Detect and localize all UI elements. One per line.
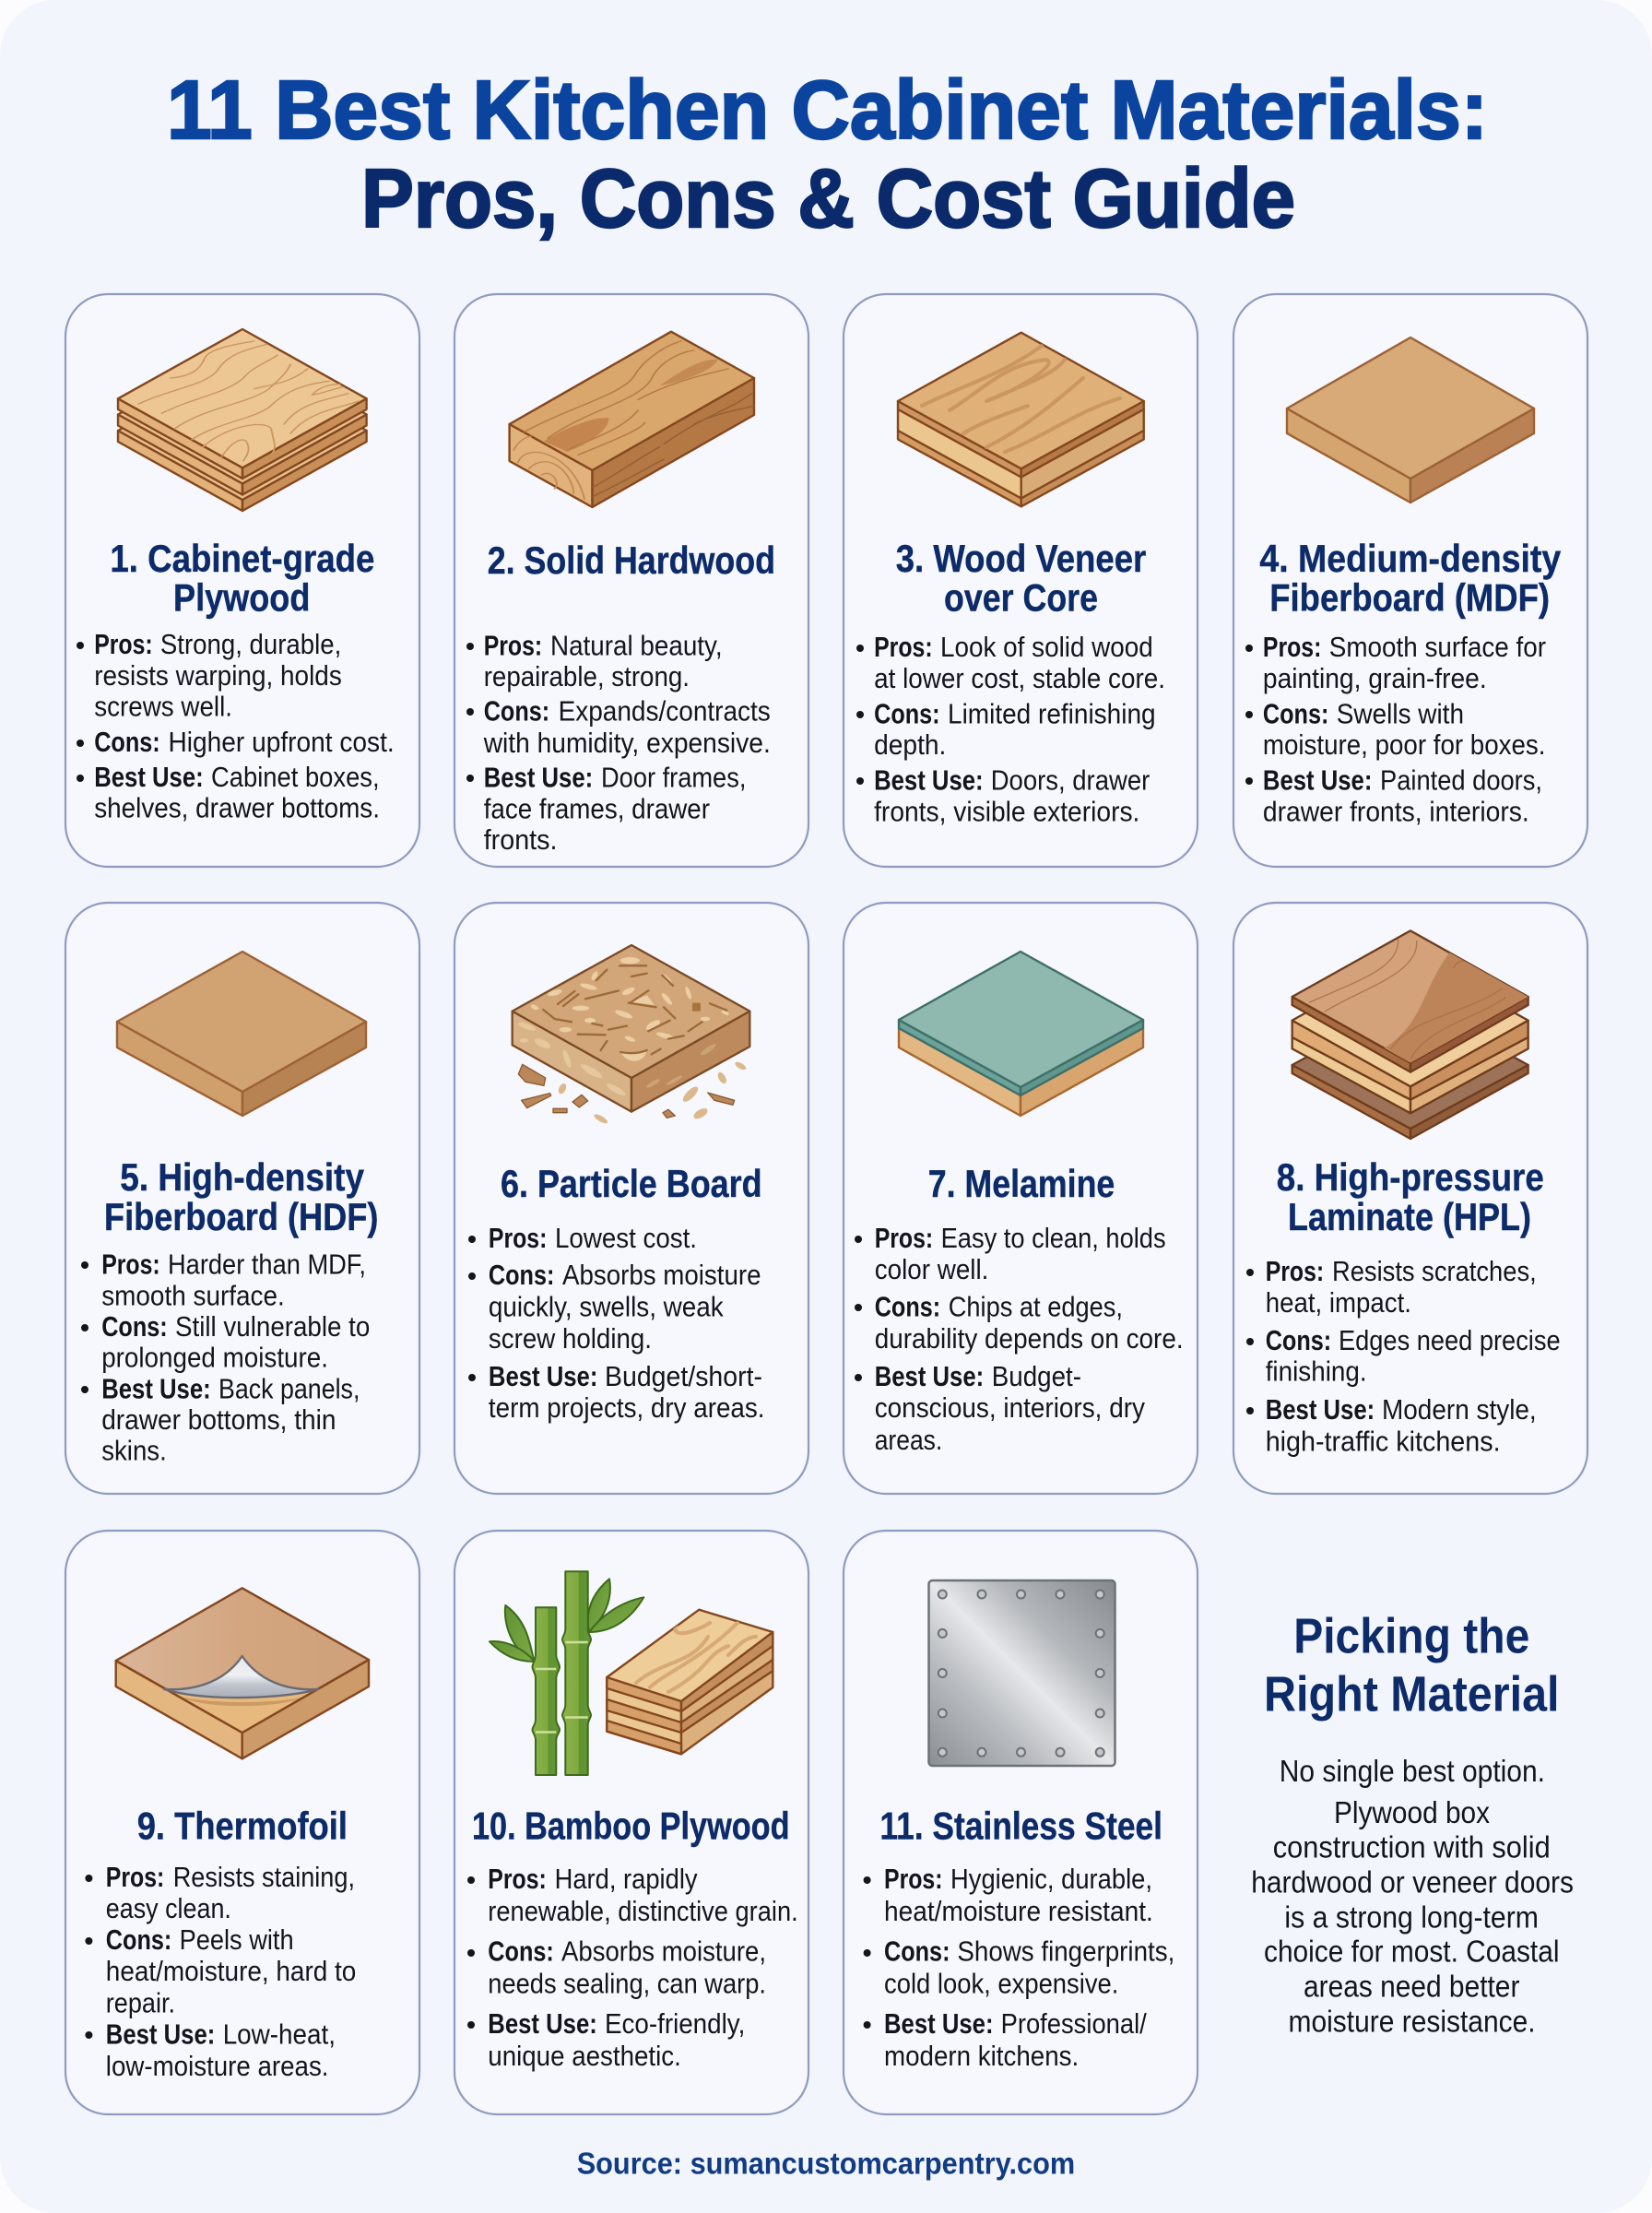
pros cons best use list: resists warping, holds [94, 659, 342, 692]
heading: over Core [944, 576, 1098, 620]
heading: Fiberboard (MDF) [1269, 576, 1550, 620]
conclusion heading [1264, 1609, 1560, 1722]
pros cons best use list [466, 629, 771, 856]
icon: particle board with flakes [513, 945, 749, 1125]
pros cons best use list: Cons: [874, 697, 940, 729]
pros cons best use list: Peels with [180, 1923, 294, 1956]
pros cons best use list: Pros: [1263, 631, 1321, 663]
pros cons best use list [1245, 631, 1546, 827]
pros cons best use list: Pros: [489, 1222, 547, 1254]
pros cons best use list: Strong, durable, [160, 628, 341, 660]
pros cons best use list: Resists staining, [173, 1861, 355, 1893]
pros cons best use list: low-moisture areas. [106, 2050, 328, 2082]
pros cons best use list: fronts. [484, 823, 557, 856]
heading: 11. Stainless Steel [879, 1804, 1162, 1847]
panel: 2 solid hardwood [454, 294, 808, 867]
heading: 9. Thermofoil [137, 1804, 348, 1847]
pros cons best use list: Best Use: [875, 1360, 984, 1392]
pros cons best use list: Absorbs moisture, [561, 1935, 766, 1968]
title: 11 Best Kitchen Cabinet Materials: [167, 65, 1488, 157]
pros cons best use list [856, 631, 1165, 827]
pros cons best use list: Cons: [106, 1923, 171, 1956]
pros cons best use list: smooth surface. [101, 1279, 285, 1311]
pros cons best use list: depth. [874, 728, 946, 761]
pros cons best use list: Pros: [874, 631, 933, 663]
pros cons best use list: fronts, visible exteriors. [874, 795, 1139, 827]
pros cons best use list: Best Use: [484, 762, 593, 794]
pros cons best use list: Resists scratches, [1332, 1255, 1537, 1287]
pros cons best use list: Still vulnerable to [175, 1310, 370, 1343]
pros cons best use list: high-traffic kitchens. [1266, 1426, 1501, 1458]
panel: 4 MDF [1233, 294, 1587, 867]
heading [110, 537, 374, 620]
pros cons best use list: Higher upfront cost. [168, 726, 395, 758]
pros cons best use list: Cons: [94, 726, 160, 758]
pros cons best use list: conscious, interiors, dry [875, 1391, 1145, 1424]
pros cons best use list: with humidity, expensive. [483, 727, 771, 759]
pros cons best use list: repair. [106, 1986, 175, 2018]
title: Pros, Cons & Cost Guide [361, 153, 1295, 245]
icon: hardwood plank [510, 332, 754, 507]
conclusion text: Plywood box [1334, 1795, 1490, 1829]
pros cons best use list: Lowest cost. [555, 1222, 697, 1254]
pros cons best use list: heat/moisture resistant. [884, 1895, 1153, 1927]
icon: HDF board [117, 952, 366, 1116]
panel: 3 wood veneer [844, 294, 1198, 867]
conclusion text: choice for most. Coastal [1264, 1935, 1560, 1969]
pros cons best use list: Natural beauty, [550, 629, 723, 661]
pros cons best use list: Best Use: [884, 2007, 994, 2040]
heading: Plywood [173, 576, 310, 620]
pros cons best use list [855, 1222, 1184, 1456]
pros cons best use list: Best Use: [874, 764, 984, 797]
icon: MDF board [1287, 337, 1534, 503]
pros cons best use list: drawer bottoms, thin [101, 1403, 336, 1436]
pros cons best use list: needs sealing, can warp. [488, 1968, 766, 2000]
pros cons best use list: repairable, strong. [484, 660, 690, 692]
icon: plywood stack [118, 329, 367, 511]
pros cons best use list: Look of solid wood [940, 631, 1153, 663]
pros cons best use list: Smooth surface for [1329, 631, 1546, 663]
icon: laminate layers [1292, 930, 1530, 1139]
pros cons best use list: moisture, poor for boxes. [1263, 728, 1545, 761]
pros cons best use list: Pros: [94, 628, 153, 660]
pros cons best use list: Painted doors, [1380, 764, 1542, 797]
pros cons best use list: Harder than MDF, [168, 1249, 366, 1280]
pros cons best use list: Professional/ [1001, 2007, 1147, 2040]
conclusion text: moisture resistance. [1289, 2004, 1536, 2038]
panel: 7 melamine [844, 903, 1198, 1494]
pros cons best use list [85, 1861, 356, 2082]
pros cons best use list: finishing. [1266, 1355, 1367, 1388]
panel: 9 thermofoil [65, 1531, 419, 2114]
conclusion text: is a strong long-term [1284, 1899, 1539, 1934]
pros cons best use list: Absorbs moisture [562, 1259, 761, 1291]
pros cons best use list: heat/moisture, hard to [106, 1955, 356, 1987]
conclusion: picking the right material [1251, 1609, 1574, 2038]
pros cons best use list [864, 1863, 1174, 2072]
heading: 8. High-pressure [1277, 1155, 1544, 1199]
conclusion heading: Right Material [1264, 1667, 1560, 1722]
pros cons best use list: easy clean. [106, 1892, 231, 1924]
pros cons best use list: screws well. [94, 690, 232, 723]
pros cons best use list: quickly, swells, weak [489, 1291, 724, 1322]
icon: steel plate with rivets [929, 1580, 1115, 1766]
pros cons best use list: term projects, dry areas. [489, 1391, 765, 1424]
pros cons best use list: Pros: [488, 1863, 547, 1895]
icon: melamine board [899, 952, 1143, 1116]
pros cons best use list: Best Use: [1263, 764, 1372, 797]
pros cons best use list [81, 1249, 370, 1467]
panel: 10 bamboo plywood [454, 1531, 808, 2114]
pros cons best use list: Swells with [1337, 697, 1464, 729]
panel: 5 HDF [65, 903, 419, 1494]
heading: 7. Melamine [928, 1162, 1115, 1205]
pros cons best use list: Edges need precise [1339, 1324, 1561, 1356]
pros cons best use list: Chips at edges, [949, 1291, 1123, 1322]
pros cons best use list: modern kitchens. [884, 2040, 1079, 2072]
heading: Laminate (HPL) [1288, 1195, 1531, 1238]
panel: 6 particle board [454, 903, 808, 1494]
pros cons best use list: Pros: [884, 1863, 942, 1895]
pros cons best use list: heat, impact. [1266, 1286, 1411, 1319]
heading [1259, 537, 1562, 620]
heading [1277, 1155, 1544, 1238]
panel: 11 stainless steel [844, 1531, 1198, 2114]
panel: 1 cabinet-grade plywood [65, 294, 419, 867]
heading: 2. Solid Hardwood [488, 538, 775, 582]
pros cons best use list: Easy to clean, holds [941, 1222, 1166, 1254]
title [167, 65, 1488, 245]
pros cons best use list: Best Use: [94, 761, 204, 793]
pros cons best use list: unique aesthetic. [488, 2040, 681, 2072]
pros cons best use list: color well. [875, 1253, 988, 1285]
pros cons best use list: Pros: [106, 1861, 164, 1893]
conclusion text: hardwood or veneer doors [1251, 1864, 1574, 1899]
pros cons best use list: Cons: [101, 1310, 168, 1343]
conclusion text [1251, 1754, 1574, 2038]
pros cons best use list: cold look, expensive. [884, 1968, 1118, 2000]
pros cons best use list: screw holding. [489, 1322, 652, 1355]
pros cons best use list: Hard, rapidly [555, 1863, 698, 1895]
pros cons best use list: Low-heat, [223, 2018, 336, 2050]
pros cons best use list: Expands/contracts [559, 694, 771, 727]
heading: 4. Medium-density [1259, 537, 1562, 580]
pros cons best use list: Pros: [101, 1249, 160, 1280]
pros cons best use list [467, 1863, 798, 2072]
heading: 10. Bamboo Plywood [472, 1804, 789, 1847]
pros cons best use list: Budget- [992, 1360, 1081, 1392]
pros cons best use list: Cons: [1263, 697, 1328, 729]
pros cons best use list [77, 628, 395, 824]
heading: 5. High-density [120, 1155, 365, 1199]
pros cons best use list: Pros: [1266, 1255, 1324, 1287]
heading: Fiberboard (HDF) [104, 1195, 378, 1238]
pros cons best use list: Cons: [488, 1935, 554, 1968]
pros cons best use list: areas. [875, 1424, 942, 1456]
pros cons best use list: Cons: [484, 694, 549, 727]
pros cons best use list: Best Use: [488, 2007, 597, 2040]
pros cons best use list: shelves, drawer bottoms. [94, 792, 380, 824]
pros cons best use list: at lower cost, stable core. [874, 662, 1165, 694]
pros cons best use list: Limited refinishing [948, 697, 1156, 729]
pros cons best use list: drawer fronts, interiors. [1263, 795, 1529, 827]
conclusion text: areas need better [1304, 1969, 1519, 2003]
pros cons best use list: Best Use: [1266, 1393, 1375, 1426]
pros cons best use list: Hygienic, durable, [950, 1863, 1152, 1895]
pros cons best use list: Budget/short- [605, 1360, 762, 1392]
pros cons best use list: Eco-friendly, [605, 2007, 745, 2040]
heading [896, 537, 1146, 620]
pros cons best use list: Best Use: [489, 1360, 597, 1392]
heading: 3. Wood Veneer [896, 537, 1146, 580]
pros cons best use list: renewable, distinctive grain. [488, 1895, 798, 1927]
pros cons best use list: Modern style, [1382, 1393, 1537, 1426]
pros cons best use list: Door frames, [601, 762, 746, 794]
pros cons best use list: durability depends on core. [875, 1322, 1184, 1355]
conclusion text: No single best option. [1280, 1754, 1545, 1788]
heading [104, 1155, 378, 1238]
heading: 6. Particle Board [501, 1162, 762, 1205]
pros cons best use list: prolonged moisture. [101, 1341, 328, 1374]
pros cons best use list: Cabinet boxes, [211, 761, 380, 793]
icon: veneer board [898, 333, 1144, 506]
pros cons best use list: Cons: [1266, 1324, 1331, 1356]
pros cons best use list [468, 1222, 765, 1424]
conclusion text: construction with solid [1273, 1830, 1551, 1864]
pros cons best use list [1246, 1255, 1561, 1458]
pros cons best use list: Best Use: [101, 1372, 211, 1404]
icon: bamboo stems and ply block [490, 1571, 773, 1775]
icon: thermofoil board with peeling film [116, 1588, 369, 1758]
pros cons best use list: Pros: [484, 629, 542, 661]
pros cons best use list: Cons: [884, 1935, 950, 1968]
heading: 1. Cabinet-grade [110, 537, 374, 580]
panel: 8 HPL [1233, 903, 1587, 1494]
pros cons best use list: Cons: [489, 1259, 554, 1291]
pros cons best use list: Cons: [875, 1291, 940, 1322]
pros cons best use list: Doors, drawer [991, 764, 1150, 797]
pros cons best use list: Best Use: [106, 2018, 215, 2050]
pros cons best use list: skins. [101, 1435, 167, 1467]
source line: Source: sumancustomcarpentry.com [577, 2146, 1075, 2180]
pros cons best use list: painting, grain-free. [1263, 662, 1487, 694]
conclusion heading: Picking the [1293, 1609, 1529, 1664]
pros cons best use list: Back panels, [218, 1372, 360, 1404]
pros cons best use list: Shows fingerprints, [957, 1935, 1174, 1968]
pros cons best use list: Pros: [875, 1222, 933, 1254]
pros cons best use list: face frames, drawer [484, 792, 710, 824]
